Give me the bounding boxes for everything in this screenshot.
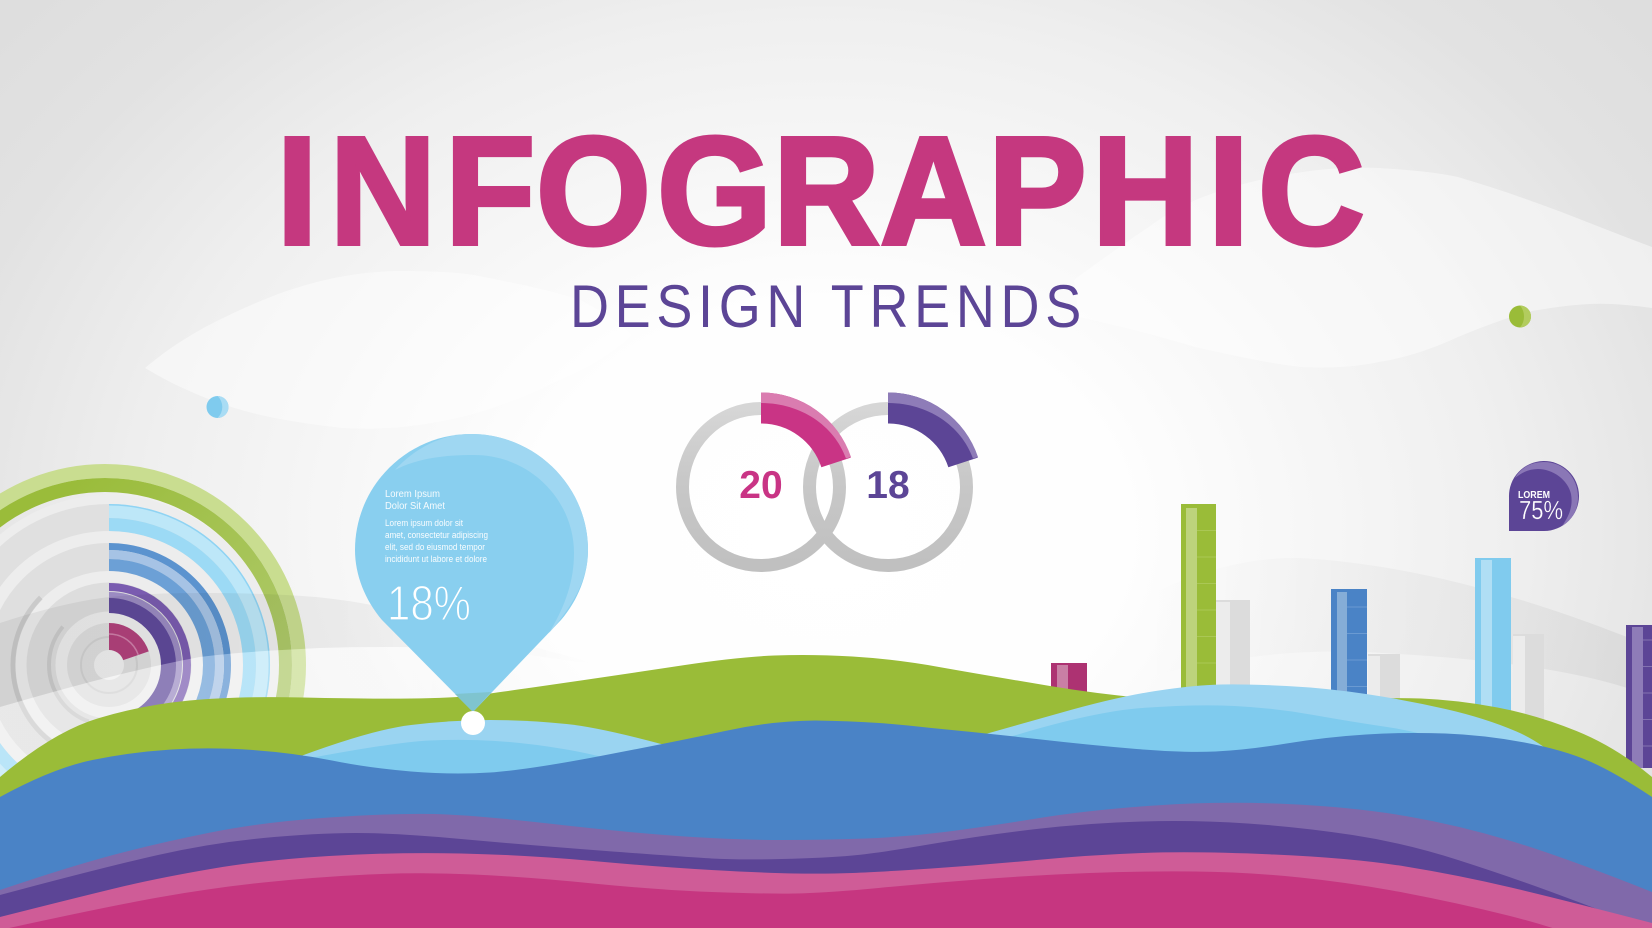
- arc: blue: [0, 546, 228, 784]
- badge: 75%: [1509, 461, 1579, 531]
- wave: light blue right: [975, 684, 1575, 800]
- badge label: LOREM: [1518, 489, 1550, 501]
- arc: purple: [31, 587, 187, 743]
- pin tip over hill: [455, 692, 491, 712]
- pin heading: Lorem Ipsum: [385, 488, 440, 500]
- pin callout: 18%: [355, 434, 588, 735]
- number 18: 18: [866, 464, 910, 507]
- background wave band: left overlay: [0, 593, 600, 707]
- pin value: 18%: [387, 577, 471, 631]
- bar: pink: [1051, 663, 1087, 725]
- ring: outer green: [0, 471, 299, 859]
- wave: light pink: [0, 852, 1652, 928]
- wave: dark purple: [0, 821, 1652, 928]
- pin body text: incididunt ut labore et dolore: [385, 554, 487, 564]
- arc: pink segment: [682, 392, 851, 566]
- bar chart: [1051, 504, 1652, 768]
- ring: right: [806, 404, 970, 570]
- wave: light purple: [0, 803, 1652, 928]
- arc: light blue: [0, 505, 269, 825]
- ring: left: [678, 404, 844, 570]
- hill: green: [0, 655, 1652, 928]
- bar: light blue with shadow: [1475, 558, 1544, 728]
- background wave: upper left white: [145, 271, 632, 429]
- wave: dark pink: [0, 871, 1600, 928]
- year rings: 20 18: [678, 392, 978, 570]
- badge value: 75%: [1519, 495, 1563, 525]
- pin heading: Dolor Sit Amet: [385, 500, 445, 512]
- pin anchor dot: [461, 711, 485, 735]
- decorative dot: blue: [206, 396, 228, 418]
- pin body text: elit, sed do eiusmod tempor: [385, 542, 485, 552]
- arc: purple segment: [809, 392, 978, 566]
- background wave: upper right white: [1074, 168, 1652, 367]
- pin body text: amet, consectetur adipiscing: [385, 530, 488, 540]
- circular ring chart: [0, 471, 299, 859]
- title: INFOGRAPHIC: [277, 104, 1365, 277]
- pin highlight: [395, 434, 588, 633]
- bar: blue with shadow: [1331, 589, 1400, 739]
- arc: pink: [78, 634, 140, 696]
- decorative dot: green: [1509, 306, 1531, 328]
- wave: light blue left: [285, 720, 690, 800]
- bar: purple: [1626, 625, 1652, 768]
- background wave band: left light overlay: [0, 647, 560, 800]
- pin body text: Lorem ipsum dolor sit: [385, 518, 463, 528]
- background wave band: right overlay: [1100, 558, 1652, 697]
- wave: blue: [0, 720, 1652, 928]
- number 20: 20: [739, 464, 783, 507]
- subtitle: DESIGN TRENDS: [570, 273, 1081, 341]
- bar: green with shadow: [1181, 504, 1250, 724]
